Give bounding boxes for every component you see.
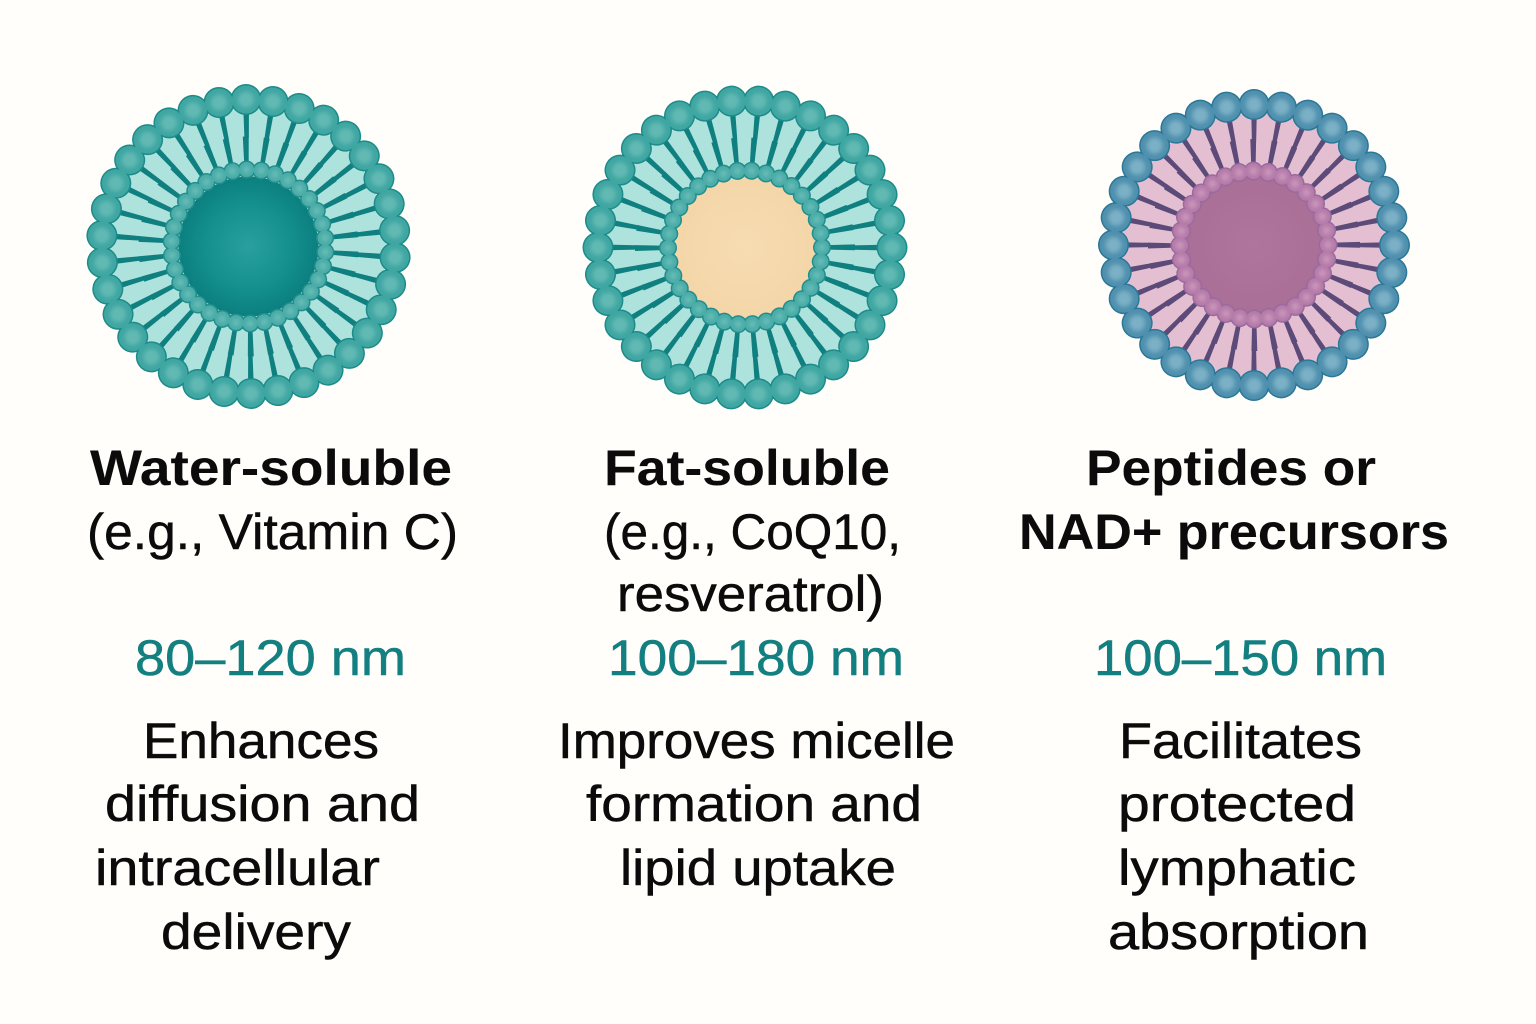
heading: peptides or NAD+ precursors: [1019, 440, 1449, 560]
heading: peptides or NAD+ precursors: Peptides or: [1086, 440, 1376, 496]
icon: teal liposome with cream core: [578, 80, 912, 415]
description: water-soluble benefit: delivery: [161, 904, 351, 960]
example: vitamin C: (e.g., Vitamin C): [87, 504, 458, 560]
description: water-soluble benefit: diffusion and: [105, 776, 420, 832]
icon: teal liposome with teal core: [96, 94, 401, 399]
description: fat-soluble benefit: formation and: [586, 776, 922, 832]
description: water-soluble benefit: intracellular: [95, 840, 380, 896]
heading: fat-soluble: Fat-soluble: [604, 440, 890, 496]
description: fat-soluble benefit: Improves micelle: [558, 713, 955, 769]
panel: water-soluble: [87, 94, 458, 960]
size range: 80–120 nm: 80–120 nm: [135, 630, 406, 686]
description: water-soluble benefit: Enhances: [143, 713, 379, 769]
example: CoQ10, resveratrol: resveratrol): [617, 566, 884, 622]
description: peptides benefit: absorption: [1108, 904, 1369, 960]
description: water-soluble benefit: [95, 713, 420, 960]
description: peptides benefit: Facilitates: [1119, 713, 1362, 769]
description: peptides benefit: [1108, 713, 1369, 960]
heading: peptides or NAD+ precursors: NAD+ precursors: [1019, 504, 1449, 560]
heading: water-soluble: Water-soluble: [90, 440, 452, 496]
description: peptides benefit: protected: [1118, 776, 1356, 832]
example: CoQ10, resveratrol: (e.g., CoQ10,: [604, 504, 901, 560]
panel: fat-soluble: [558, 80, 955, 896]
description: fat-soluble benefit: [558, 713, 955, 896]
description: fat-soluble benefit: lipid uptake: [620, 840, 896, 896]
description: peptides benefit: lymphatic: [1118, 840, 1356, 896]
panel: peptides or NAD+ precursors: [1019, 96, 1449, 960]
size range: 100–180 nm: 100–180 nm: [608, 630, 904, 686]
size range: 100–150 nm: 100–150 nm: [1094, 630, 1387, 686]
icon: blue and pink liposome with mauve core: [1105, 96, 1403, 394]
example: CoQ10, resveratrol: [604, 504, 901, 622]
